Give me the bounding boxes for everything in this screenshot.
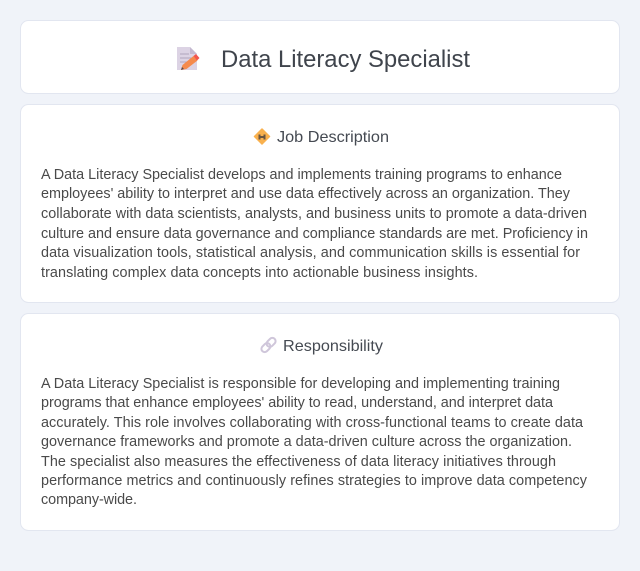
panel: job description — [20, 104, 620, 302]
text block: responsibility: performance metrics and continuously refines strategies to improve data competency — [41, 473, 588, 489]
text block: responsibility: The specialist also measures the effectiveness of data literacy initiatives through — [41, 454, 556, 470]
text block: responsibility: accurately. This role involves collaborating with cross-functional teams to create data — [41, 415, 583, 431]
text block: responsibility: company-wide. — [41, 492, 137, 508]
heading: job description: Job Description — [277, 129, 389, 146]
icon: chain link — [260, 337, 277, 353]
text block: job description: collaborate with data scientists, analysts, and business units to promote a data-driven — [41, 206, 587, 222]
icon: diamond sign — [254, 129, 270, 144]
text block: responsibility: governance frameworks and promote a data-driven culture across the organization. — [41, 434, 572, 450]
panel: responsibility — [20, 314, 620, 530]
text block: job description: culture and ensure data governance and compliance standards are met. Proficiency in — [41, 226, 588, 242]
text block: job description — [41, 167, 588, 281]
title: Data Literacy Specialist — [221, 46, 470, 73]
text block: responsibility — [41, 376, 588, 508]
panel: title card — [20, 20, 620, 94]
heading: responsibility: Responsibility — [283, 338, 383, 355]
text block: job description: employees' ability to interpret and use data effectively across an organization. They — [41, 186, 571, 202]
text block: responsibility: A Data Literacy Specialist is responsible for developing and implementing training — [41, 376, 560, 392]
text block: job description: data visualization tools, statistical analysis, and communication skills is essential for — [41, 245, 580, 261]
text block: job description: A Data Literacy Specialist develops and implements training programs to enhance — [41, 167, 562, 183]
text block: responsibility: programs that enhance employees' ability to read, understand, and interpret data — [41, 395, 553, 411]
text block: job description: translating complex data concepts into actionable business insights. — [41, 265, 478, 281]
icon: document with pencil — [177, 47, 200, 70]
